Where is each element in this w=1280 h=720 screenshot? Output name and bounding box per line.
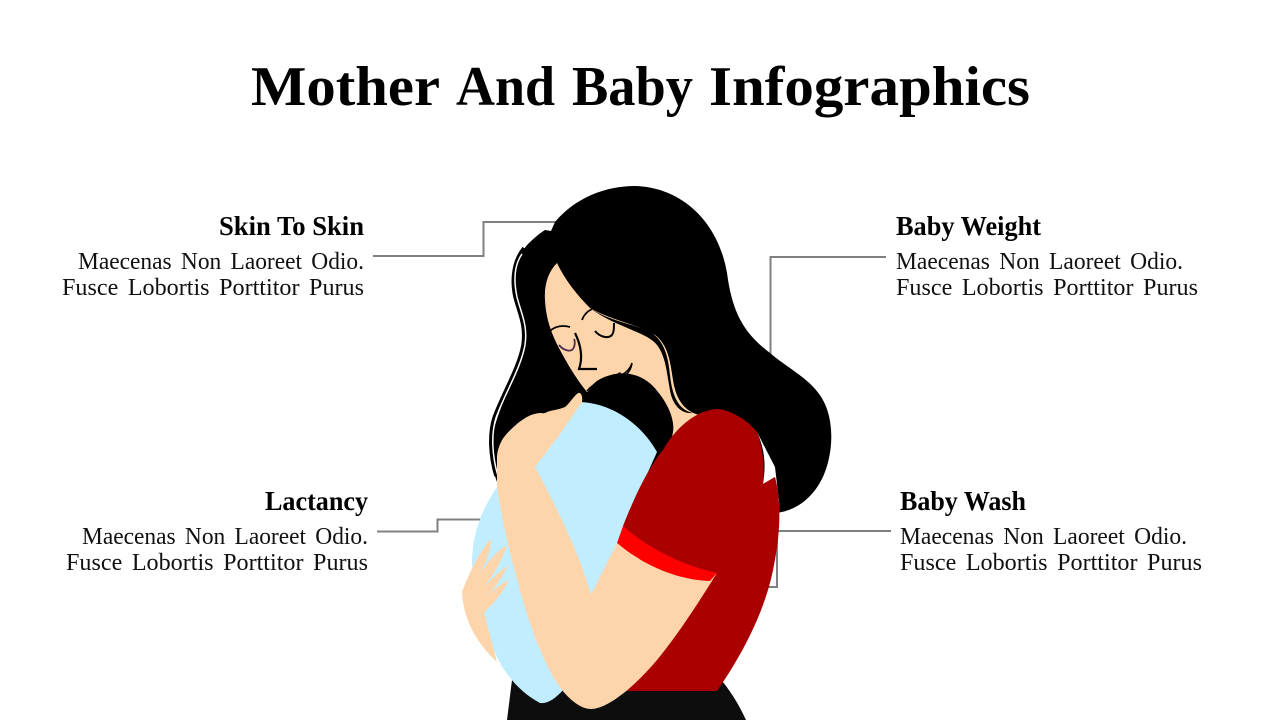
hair strand along the face xyxy=(590,308,693,413)
hair: back and crown xyxy=(491,186,831,513)
text block: skin to skin xyxy=(62,211,364,301)
text block: lactancy xyxy=(66,486,368,576)
mother's red shirt xyxy=(620,409,779,691)
baby's head xyxy=(585,373,673,462)
hair: outer strand outline and white strand xyxy=(491,248,526,476)
text block: lactancy: Fusce Lobortis Porttitor Purus xyxy=(66,550,368,576)
illustration: mother holding baby xyxy=(462,186,831,720)
text block: baby weight: Maecenas Non Laoreet Odio. xyxy=(896,249,1183,275)
white gap beside sleeve xyxy=(757,432,780,510)
title: And xyxy=(456,56,555,118)
baby blanket xyxy=(472,402,657,703)
text block: lactancy: Lactancy xyxy=(265,486,368,516)
text block: baby weight: Fusce Lobortis Porttitor Purus xyxy=(896,275,1198,301)
mother's face and neck xyxy=(545,263,700,445)
connector: baby weight xyxy=(770,257,886,362)
mother's body xyxy=(507,676,746,720)
connector: skin to skin xyxy=(373,222,556,256)
text block: skin to skin: Skin To Skin xyxy=(219,211,364,241)
text block: skin to skin: Maecenas Non Laoreet Odio. xyxy=(78,249,364,275)
text block: baby wash: Fusce Lobortis Porttitor Purus xyxy=(900,550,1202,576)
connector: baby wash xyxy=(740,531,891,587)
title: Infographics xyxy=(709,56,1030,118)
title: Baby xyxy=(572,56,693,118)
text block: baby wash: Maecenas Non Laoreet Odio. xyxy=(900,524,1187,550)
text block: lactancy: Maecenas Non Laoreet Odio. xyxy=(82,524,368,550)
text block: baby weight xyxy=(896,211,1198,301)
mother's other hand with fingers xyxy=(462,539,509,662)
title: Mother xyxy=(251,56,440,118)
title xyxy=(251,56,1030,118)
face: eyes, brows, nose and mouth xyxy=(550,309,632,391)
text block: baby wash xyxy=(900,486,1202,576)
text block: baby wash: Baby Wash xyxy=(900,486,1026,516)
connector: lactancy xyxy=(377,520,484,532)
mother's arm and hand xyxy=(497,393,717,709)
sleeve cuff xyxy=(617,526,717,581)
text block: baby weight: Baby Weight xyxy=(896,211,1041,241)
text block: skin to skin: Fusce Lobortis Porttitor Purus xyxy=(62,275,364,301)
